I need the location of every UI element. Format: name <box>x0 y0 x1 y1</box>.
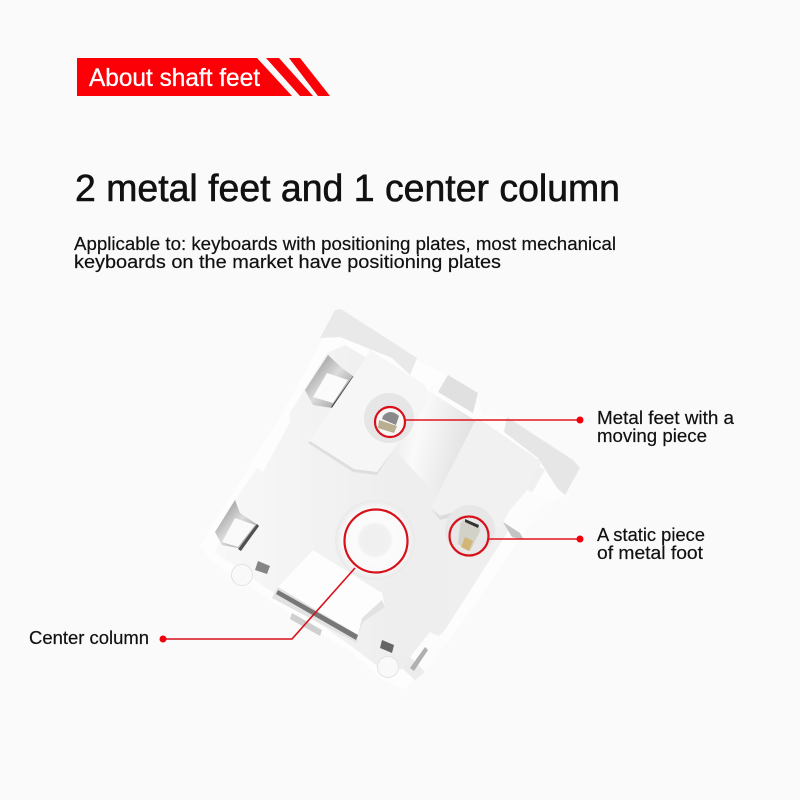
cylindrical band beside upper socket <box>395 385 482 505</box>
section banner: About shaft feet <box>77 58 330 96</box>
callout: center column <box>29 510 408 648</box>
callout: metal feet with a moving piece: moving piece <box>597 426 707 446</box>
lower right metal block <box>503 490 550 533</box>
title: 2 metal feet and 1 center column <box>75 168 620 210</box>
callout: static piece of metal foot: of metal foot <box>597 543 703 563</box>
keyboard switch underside illustration <box>200 309 580 690</box>
raised right pad <box>431 418 542 530</box>
white outer silhouette <box>200 309 580 690</box>
small round studs <box>232 564 252 586</box>
callout: static piece of metal foot <box>450 516 705 563</box>
left upper metal contact window <box>305 355 353 408</box>
metal foot socket: moving piece <box>364 393 414 443</box>
section banner: About shaft feet: About shaft feet <box>89 64 260 92</box>
bottom notch <box>410 632 447 672</box>
description text: Applicable to: keyboards with positioning plates, most mechanical <box>74 234 616 254</box>
top notch tabs <box>438 375 478 413</box>
callout: static piece of metal foot: A static piece <box>597 525 705 545</box>
raised upper pad <box>308 350 430 475</box>
description text: keyboards on the market have positioning plates <box>74 252 501 272</box>
top flange <box>320 309 417 375</box>
center column <box>335 500 415 580</box>
callout: metal feet with a moving piece: Metal feet with a <box>597 408 735 428</box>
callout: center column: Center column <box>29 628 149 648</box>
lower slot block <box>278 550 385 635</box>
right flange <box>504 417 580 495</box>
small square holes <box>255 561 270 574</box>
callout: metal feet with a moving piece <box>375 407 735 446</box>
left lower metal contact window <box>215 500 258 548</box>
metal foot socket: static piece <box>445 505 495 555</box>
switch body <box>215 345 545 672</box>
description text <box>74 234 616 272</box>
